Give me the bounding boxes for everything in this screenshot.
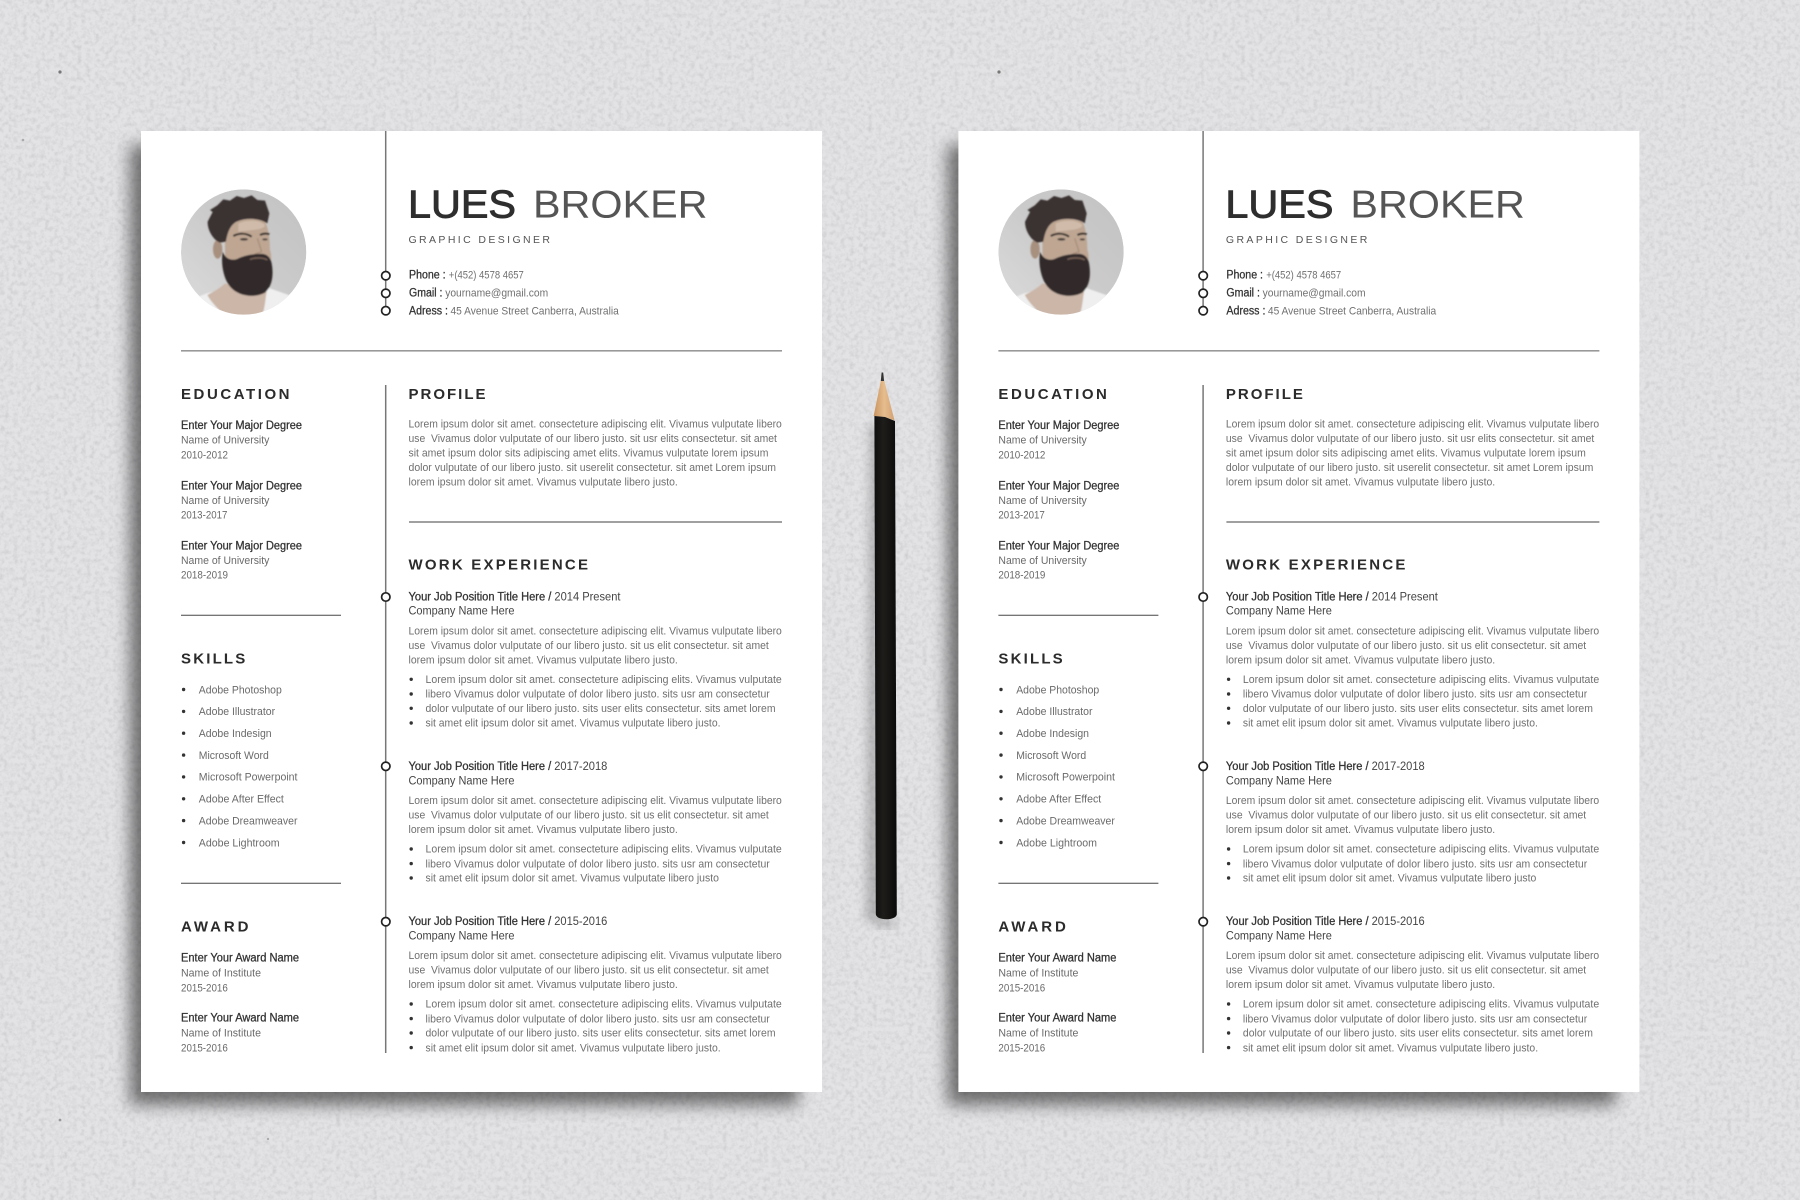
skills section <box>181 650 298 849</box>
education section <box>181 386 302 582</box>
contact details: Adress : <box>409 305 448 317</box>
job entry 3 <box>382 916 782 1054</box>
education section: Enter Your Major Degree <box>998 480 1119 492</box>
skills section: Adobe Lightroom <box>199 837 280 849</box>
timeline line <box>1202 131 1204 1053</box>
job entry 3: Company Name Here <box>1226 930 1332 942</box>
job entry 2: libero Vivamus dolor vulputate of dolor libero justo. sits usr am consectetur <box>426 858 770 870</box>
job entry 2 <box>382 761 782 885</box>
skills section: Microsoft Powerpoint <box>199 772 298 784</box>
job entry 2: Lorem ipsum dolor sit amet. consecteture adipiscing elits. Vivamus vulputate <box>426 844 782 856</box>
education section: EDUCATION <box>998 386 1107 403</box>
job entry 2 <box>1199 761 1599 885</box>
job entry 3: sit amet elit ipsum dolor sit amet. Vivamus vulputate libero justo. <box>1243 1042 1538 1054</box>
job entry 1: Company Name Here <box>408 606 514 618</box>
portrait photo <box>181 189 306 320</box>
skills section: Adobe After Effect <box>1016 794 1101 806</box>
profile section: lorem ipsum dolor sit amet. Vivamus vulputate libero justo. <box>1226 477 1495 489</box>
job entry 3: lorem ipsum dolor sit amet. Vivamus vulputate libero justo. <box>1226 979 1495 991</box>
job title: GRAPHIC DESIGNER <box>408 234 550 246</box>
award section: Name of Institute <box>181 967 261 979</box>
job entry 1: Your Job Position Title Here / 2014 Present <box>408 591 621 603</box>
profile section: Lorem ipsum dolor sit amet. consecteture adipiscing elit. Vivamus vulputate libero <box>408 418 782 430</box>
job entry 3: lorem ipsum dolor sit amet. Vivamus vulputate libero justo. <box>408 979 678 991</box>
contact details: Adress : <box>1226 305 1265 317</box>
page sheet <box>141 131 822 1092</box>
job entry 3: Lorem ipsum dolor sit amet. consecteture adipiscing elits. Vivamus vulputate <box>1243 999 1599 1011</box>
skills section: Adobe Dreamweaver <box>199 815 298 827</box>
work experience heading: WORK EXPERIENCE <box>1226 557 1405 574</box>
job entry 1 <box>382 591 782 730</box>
job entry 3: Lorem ipsum dolor sit amet. consecteture adipiscing elit. Vivamus vulputate libero <box>1226 950 1599 962</box>
award section: 2015-2016 <box>998 1042 1045 1054</box>
education section: 2013-2017 <box>998 510 1045 522</box>
contact details: Phone : <box>1226 270 1263 282</box>
job entry 2: lorem ipsum dolor sit amet. Vivamus vulputate libero justo. <box>1226 824 1495 836</box>
job entry 2: Lorem ipsum dolor sit amet. consecteture adipiscing elits. Vivamus vulputate <box>1243 844 1599 856</box>
job entry 1: lorem ipsum dolor sit amet. Vivamus vulputate libero justo. <box>1226 654 1495 666</box>
job entry 3: use Vivamus dolor vulputate of our libero justo. sit us elit consectetur. sit amet <box>408 965 769 977</box>
job entry 1: Lorem ipsum dolor sit amet. consecteture adipiscing elit. Vivamus vulputate libero <box>1226 625 1599 637</box>
job entry 3: sit amet elit ipsum dolor sit amet. Vivamus vulputate libero justo. <box>426 1042 721 1054</box>
job entry 3 <box>1199 916 1599 1054</box>
education section: Name of University <box>998 435 1087 447</box>
skills section: Adobe Photoshop <box>1016 684 1099 696</box>
job entry 1: Your Job Position Title Here / 2014 Present <box>1226 591 1439 603</box>
profile section: Lorem ipsum dolor sit amet. consecteture adipiscing elit. Vivamus vulputate libero <box>1226 418 1599 430</box>
contact details: yourname@gmail.com <box>1263 287 1366 299</box>
page shadow <box>130 145 798 1105</box>
contact details: 45 Avenue Street Canberra, Australia <box>450 305 620 317</box>
job entry 3: dolor vulputate of our libero justo. sits user elits consectetur. sits amet lorem <box>1243 1028 1593 1040</box>
education section: Name of University <box>998 495 1087 507</box>
education section: Enter Your Major Degree <box>181 420 302 432</box>
skills section: Adobe Indesign <box>199 728 272 740</box>
contact details: Gmail : <box>1226 287 1260 299</box>
job entry 3: use Vivamus dolor vulputate of our libero justo. sit us elit consectetur. sit amet <box>1226 965 1586 977</box>
skills section: Microsoft Word <box>1016 750 1086 762</box>
education section: 2013-2017 <box>181 510 227 522</box>
contact details: +(452) 4578 4657 <box>449 270 524 282</box>
profile section: dolor vulputate of our libero justo. sit userelit consectetur. sit amet Lorem ipsum <box>408 462 776 474</box>
skills section: Microsoft Word <box>199 750 269 762</box>
skills section <box>998 650 1115 849</box>
job entry 3: Company Name Here <box>408 930 514 942</box>
job entry 2: lorem ipsum dolor sit amet. Vivamus vulputate libero justo. <box>408 824 678 836</box>
profile section: use Vivamus dolor vulputate of our libero justo. sit usr elits consectetur. sit amet <box>1226 433 1594 445</box>
profile section: dolor vulputate of our libero justo. sit userelit consectetur. sit amet Lorem ipsum <box>1226 462 1593 474</box>
education section: 2010-2012 <box>181 450 228 462</box>
profile section <box>408 386 782 489</box>
job entry 1: libero Vivamus dolor vulputate of dolor libero justo. sits usr am consectetur <box>1243 689 1588 701</box>
award section: Enter Your Award Name <box>998 1013 1116 1025</box>
job entry 2: sit amet elit ipsum dolor sit amet. Vivamus vulputate libero justo <box>1243 873 1536 885</box>
name title <box>1225 184 1525 227</box>
education section: Enter Your Major Degree <box>181 540 302 552</box>
education section: Name of University <box>181 555 270 567</box>
award section: Name of Institute <box>998 967 1078 979</box>
job entry 1: dolor vulputate of our libero justo. sits user elits consectetur. sits amet lorem <box>1243 703 1593 715</box>
work experience heading: WORK EXPERIENCE <box>408 557 588 574</box>
job entry 2: Company Name Here <box>1226 775 1332 787</box>
profile section: sit amet ipsum dolor sits adipiscing amet elits. Vivamus vulputate lorem ipsum <box>1226 448 1586 460</box>
education section: Name of University <box>181 495 270 507</box>
skills section: Adobe Lightroom <box>1016 837 1097 849</box>
skills section: Adobe Dreamweaver <box>1016 815 1115 827</box>
job entry 1: Lorem ipsum dolor sit amet. consecteture adipiscing elits. Vivamus vulputate <box>426 674 782 686</box>
contact details: Phone : <box>409 270 446 282</box>
education section: Enter Your Major Degree <box>998 540 1119 552</box>
job entry 3: Your Job Position Title Here / 2015-2016 <box>408 916 607 928</box>
portrait photo <box>998 189 1124 320</box>
job entry 1: sit amet elit ipsum dolor sit amet. Vivamus vulputate libero justo. <box>1243 718 1538 730</box>
name title <box>408 184 708 227</box>
job entry 2: sit amet elit ipsum dolor sit amet. Vivamus vulputate libero justo <box>426 873 719 885</box>
page shadow <box>947 145 1615 1105</box>
education section: 2018-2019 <box>181 570 228 582</box>
pencil <box>866 372 898 928</box>
job entry 1 <box>1199 591 1599 730</box>
profile section: use Vivamus dolor vulputate of our libero justo. sit usr elits consectetur. sit amet <box>408 433 777 445</box>
award section: AWARD <box>998 918 1066 935</box>
panel: right resume page <box>947 131 1639 1105</box>
name title: LUES <box>1225 184 1333 227</box>
contact details <box>382 270 620 317</box>
job entry 3: libero Vivamus dolor vulputate of dolor libero justo. sits usr am consectetur <box>426 1013 770 1025</box>
contact details: 45 Avenue Street Canberra, Australia <box>1268 305 1437 317</box>
award section: 2015-2016 <box>181 1042 228 1054</box>
contact details <box>1199 270 1437 317</box>
job entry 2: Your Job Position Title Here / 2017-2018 <box>1226 761 1425 773</box>
job entry 1: Lorem ipsum dolor sit amet. consecteture adipiscing elits. Vivamus vulputate <box>1243 674 1599 686</box>
job entry 2: Your Job Position Title Here / 2017-2018 <box>408 761 607 773</box>
award section <box>181 918 299 1054</box>
education section <box>998 386 1119 582</box>
job entry 2: use Vivamus dolor vulputate of our libero justo. sit us elit consectetur. sit amet <box>408 810 769 822</box>
education section: Name of University <box>181 435 270 447</box>
skills section: Adobe Photoshop <box>199 684 282 696</box>
job entry 2: use Vivamus dolor vulputate of our libero justo. sit us elit consectetur. sit amet <box>1226 810 1586 822</box>
education section: Enter Your Major Degree <box>181 480 302 492</box>
panel: left resume page <box>130 131 822 1105</box>
skills section: Adobe After Effect <box>199 794 284 806</box>
job entry 3: Lorem ipsum dolor sit amet. consecteture adipiscing elits. Vivamus vulputate <box>426 999 782 1011</box>
award section: 2015-2016 <box>181 982 228 994</box>
job title: GRAPHIC DESIGNER <box>1226 234 1368 246</box>
skills section: Adobe Illustrator <box>199 706 275 718</box>
award section: 2015-2016 <box>998 982 1045 994</box>
profile section <box>1226 386 1599 489</box>
skills section: SKILLS <box>181 650 245 667</box>
job entry 3: Lorem ipsum dolor sit amet. consecteture adipiscing elit. Vivamus vulputate libero <box>408 950 782 962</box>
profile section: PROFILE <box>408 386 486 403</box>
job entry 2: Lorem ipsum dolor sit amet. consecteture adipiscing elit. Vivamus vulputate libero <box>1226 795 1599 807</box>
award section <box>998 918 1116 1054</box>
job entry 3: dolor vulputate of our libero justo. sits user elits consectetur. sits amet lorem <box>426 1028 776 1040</box>
job entry 1: lorem ipsum dolor sit amet. Vivamus vulputate libero justo. <box>408 654 678 666</box>
award section: Enter Your Award Name <box>181 953 299 965</box>
skills section: Adobe Illustrator <box>1016 706 1093 718</box>
award section: Name of Institute <box>998 1027 1078 1039</box>
skills section: SKILLS <box>998 650 1063 667</box>
job entry 1: use Vivamus dolor vulputate of our libero justo. sit us elit consectetur. sit amet <box>1226 640 1586 652</box>
job entry 2: libero Vivamus dolor vulputate of dolor libero justo. sits usr am consectetur <box>1243 858 1588 870</box>
job entry 1: sit amet elit ipsum dolor sit amet. Vivamus vulputate libero justo. <box>426 718 720 730</box>
job entry 1: Lorem ipsum dolor sit amet. consecteture adipiscing elit. Vivamus vulputate libero <box>408 625 782 637</box>
name title: BROKER <box>533 184 708 227</box>
contact details: +(452) 4578 4657 <box>1266 270 1341 282</box>
profile section: sit amet ipsum dolor sits adipiscing amet elits. Vivamus vulputate lorem ipsum <box>408 448 768 460</box>
award section: Enter Your Award Name <box>181 1013 299 1025</box>
page sheet <box>958 131 1639 1092</box>
education section: Enter Your Major Degree <box>998 420 1119 432</box>
contact details: Gmail : <box>409 287 442 299</box>
job entry 1: dolor vulputate of our libero justo. sits user elits consectetur. sits amet lorem <box>426 703 776 715</box>
education section: 2018-2019 <box>998 570 1045 582</box>
education section: EDUCATION <box>181 386 290 403</box>
job entry 2: Company Name Here <box>408 775 514 787</box>
education section: Name of University <box>998 555 1087 567</box>
job entry 1: libero Vivamus dolor vulputate of dolor libero justo. sits usr am consectetur <box>426 689 770 701</box>
name title: LUES <box>408 184 516 227</box>
job entry 3: libero Vivamus dolor vulputate of dolor libero justo. sits usr am consectetur <box>1243 1013 1588 1025</box>
contact details: yourname@gmail.com <box>445 287 548 299</box>
job entry 1: use Vivamus dolor vulputate of our libero justo. sit us elit consectetur. sit amet <box>408 640 769 652</box>
timeline line <box>385 131 387 1053</box>
award section: AWARD <box>181 918 249 935</box>
education section: 2010-2012 <box>998 450 1045 462</box>
profile section: lorem ipsum dolor sit amet. Vivamus vulputate libero justo. <box>408 477 678 489</box>
profile section: PROFILE <box>1226 386 1303 403</box>
award section: Enter Your Award Name <box>998 953 1116 965</box>
name title: BROKER <box>1350 184 1525 227</box>
job entry 1: Company Name Here <box>1226 606 1332 618</box>
job entry 2: Lorem ipsum dolor sit amet. consecteture adipiscing elit. Vivamus vulputate libero <box>408 795 782 807</box>
job entry 3: Your Job Position Title Here / 2015-2016 <box>1226 916 1425 928</box>
skills section: Adobe Indesign <box>1016 728 1089 740</box>
award section: Name of Institute <box>181 1027 261 1039</box>
skills section: Microsoft Powerpoint <box>1016 772 1115 784</box>
